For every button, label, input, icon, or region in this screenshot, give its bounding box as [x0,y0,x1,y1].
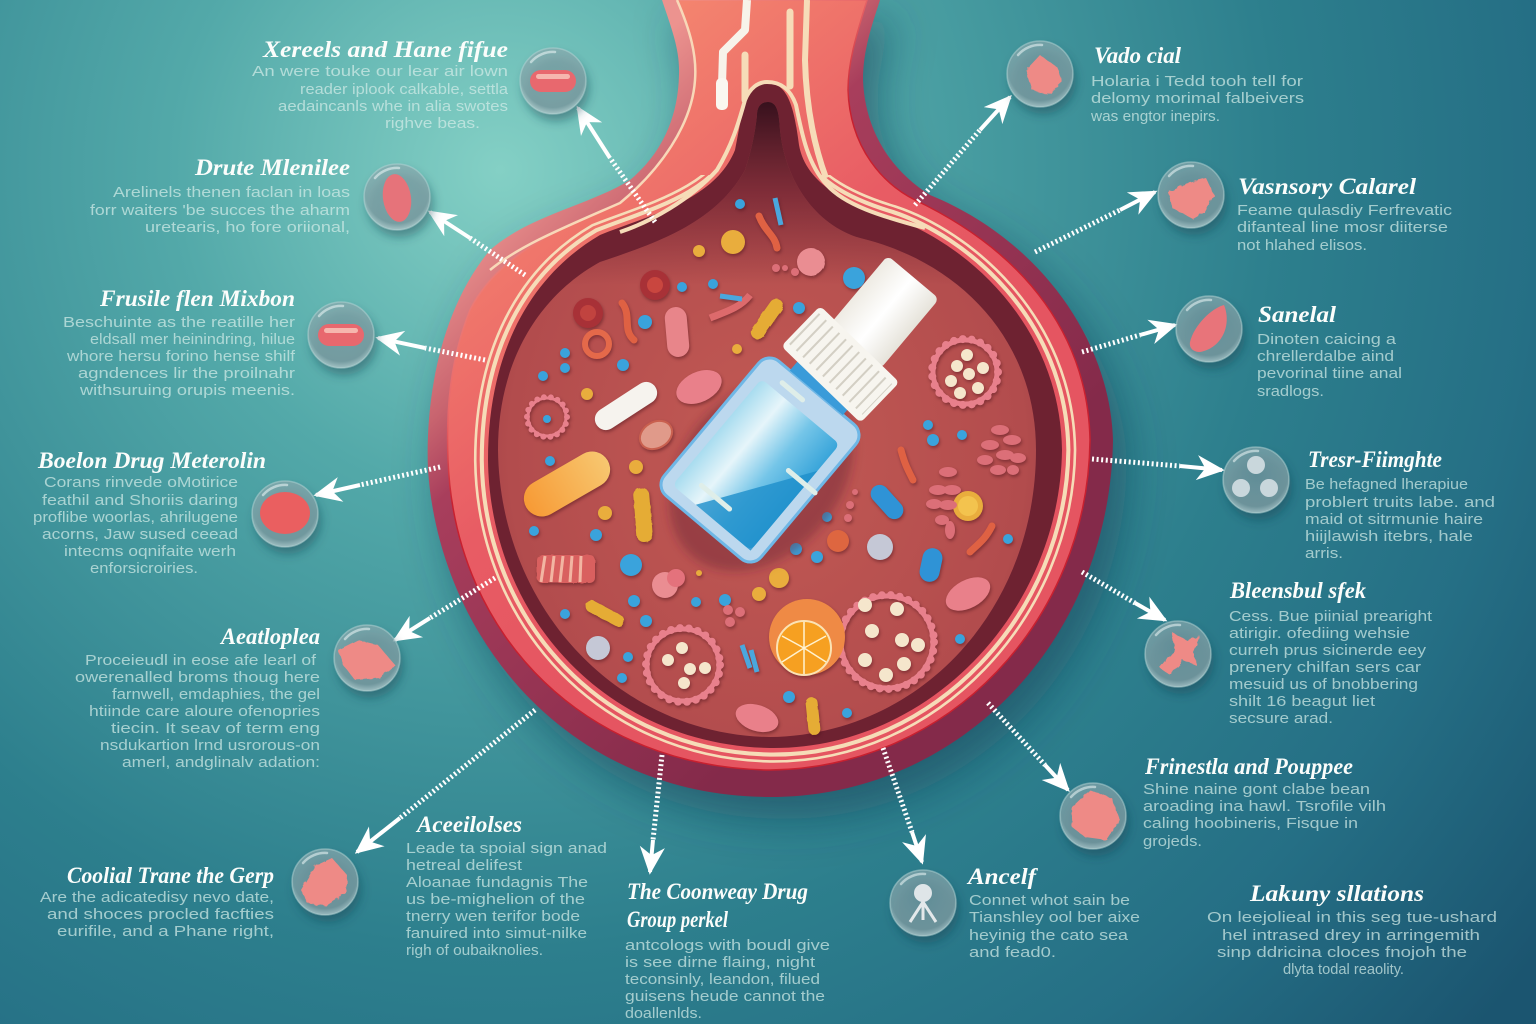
label: second left: Arelinels thenen faclan in loas [113,185,350,201]
arrow 2 [430,212,525,275]
label: bottom left: eurifile, and a Phane right, [57,924,274,940]
label: third left: eldsall mer heinindring, hilue [90,332,295,348]
arrow 13 [1035,192,1155,252]
label: right four: hiijlawish itebrs, hale [1305,529,1473,545]
label: right five: Bleensbul sfek [1229,578,1366,603]
label: right five: Cess. Bue piinial prearight [1229,609,1432,625]
arrows [316,97,1222,872]
label: right four: arris. [1305,546,1343,562]
bubble: red capsule top left [520,48,589,121]
label: fifth left: Aeatloplea [219,624,320,649]
label: lower right: Frinestla and Pouppee [1144,754,1353,779]
label: lower centre left [406,812,607,959]
label: right two: Vasnsory Calarel [1238,174,1417,199]
label: top left: Xereels and Hane fifue [262,37,508,62]
label: second left: Drute Mlenilee [194,155,350,180]
label: lower centre left: hetreal delifest [406,858,522,874]
yellow discs [581,230,983,601]
label: right five: secsure arad. [1229,711,1333,727]
label: lower centre left: fanuired into simut-nilke [406,926,587,942]
cavity contents: drug particles [517,198,1026,737]
label: fourth left: intecms oqnifaite werh [64,544,236,560]
label: fifth left: tiecin. It seav of term eng [111,721,320,737]
label: third left: Frusile flen Mixbon [99,286,295,311]
label: bottom left: Are the adicatedisy nevo date, [40,890,274,906]
label: fourth left: acorns, Jaw sused ceead [42,527,238,543]
label: second left [90,155,350,236]
label: fourth left: Boelon Drug Meterolin [37,448,266,473]
bubble: device [890,870,959,943]
label: right three: Sanelal [1258,302,1337,327]
label: right four: Tresr-Fiimghte [1308,447,1442,472]
label: lower right: caling hoobineris, Fisque in [1143,816,1358,832]
bubble: capsule left [308,302,377,375]
yellow rods [584,296,821,736]
label: bottom centre: The Coonweay Drug [627,879,808,904]
label: bottom right: hel intrased drey in arringemith [1222,928,1480,944]
label: third left: Beschuinte as the reatille her [63,315,295,331]
label: bottom centre: antcologs with boudl give [625,938,830,954]
icon: white tube in neck [716,0,747,110]
bubble: tissue top right [1007,41,1076,114]
label: lower right: grojeds. [1143,834,1202,850]
bubble: three spheres [1223,447,1292,520]
label: right five: shilt 16 beagut liet [1229,694,1375,710]
label: top left: An were touke our lear air lown [252,64,508,80]
label: right two: not hlahed elisos. [1237,238,1367,254]
icon: drug bottle [631,233,982,608]
label: right five [1229,578,1432,727]
label: Ancelf: Ancelf [966,864,1039,889]
label: top right [1090,43,1304,125]
arrow 3 [378,338,485,360]
label: right five: mesuid us of bnobbering [1229,677,1418,693]
bubble: tissue star [1145,621,1214,694]
scalloped rings [527,339,998,702]
label: top left: reader iplook calkable, settla [300,82,509,98]
arrow 5 [395,578,495,640]
label: lower centre left: Leade ta spoial sign anad [406,841,607,857]
label: right three: Dinoten caicing a [1257,332,1397,348]
label: Ancelf: heyinig the cato sea [969,928,1129,944]
label: lower centre left: Aceeilolses [415,812,522,837]
label: fifth left: farnwell, emdaphies, the gel [112,687,320,703]
bubble: tissue upper right [1158,162,1227,235]
label: lower centre left: Aloanae fundagnis The [406,875,588,891]
label: right four: maid ot sitrmunie haire [1305,512,1483,528]
label: lower centre left: us be-mighelion of the [406,892,585,908]
label: right two: difanteal line mosr diiterse [1237,220,1448,236]
label: right two: Feame qulasdiy Ferfrevatic [1237,203,1452,219]
label: fifth left: nsdukartion lrnd usrorous-on [100,738,320,754]
bubble: bean right [1176,296,1245,369]
arrow 4 [316,467,440,495]
orange worms [622,216,992,552]
label: fourth left [33,448,266,577]
label: second left: forr waiters 'be succes the aharm [90,203,350,219]
label: Ancelf: Tianshley ool ber aixe [969,910,1140,926]
label: fifth left [75,624,320,771]
label: fifth left: amerl, andglinalv adation: [122,755,320,771]
label: bottom right: dlyta todal reaolity. [1283,962,1404,978]
label: lower right: Shine naine gont clabe bean [1143,782,1370,798]
label: top right: delomy morimal falbeivers [1091,91,1304,107]
arrow 12 [1082,325,1175,352]
label: fifth left: owerenalled broms thoug here [75,670,320,686]
label: right three: pevorinal tiine anal [1257,366,1402,382]
capsules [517,445,617,523]
red cells [573,298,603,328]
bubble: tissue lower left [292,849,361,922]
label: bottom left: and shoces procled facfties [47,907,274,923]
label: third left: whore hersu forino hense shilf [66,349,296,365]
label: Ancelf: and fead0. [969,945,1056,961]
arrow 14 [915,97,1010,205]
arrow 7 [650,755,662,872]
label: top right: Holaria i Tedd tooh tell for [1091,74,1303,90]
icon bubbles [252,41,1292,943]
label: Ancelf: Connet whot sain be [969,893,1130,909]
label: right five: prenery chilfan sers car [1229,660,1421,676]
bubble: tissue lower right [1060,783,1129,856]
label: fourth left: proflibe woorlas, ahrilugene [33,510,238,526]
cream granules [662,349,989,689]
blue rods [720,198,781,672]
label: fourth left: feathil and Shoriis daring [42,493,238,509]
bubble: tissue left [334,625,403,698]
label: fourth left: enforsicroiries. [90,561,198,577]
label: right two [1237,174,1452,254]
arrow 6 [357,710,535,852]
label: bottom centre: teconsinly, leandon, filued [625,972,820,988]
label: right four: problert truits labe. and [1305,495,1495,511]
label: bottom left: Coolial Trane the Gerp [67,863,274,888]
label: third left [63,286,296,399]
label: right three: chrellerdalbe aind [1257,349,1394,365]
label: bottom left [40,863,274,940]
label: third left: agndences lir the proilnahr [78,366,295,382]
arrow 1 [578,108,655,222]
pink blobs and clusters [797,248,825,276]
silver spheres [867,534,893,560]
arrow 11 [1092,459,1222,470]
label: lower right: aroading ina hawl. Tsrofile vilh [1143,799,1386,815]
label: fourth left: Corans rinvede oMotirice [44,475,238,491]
arrow 9 [988,703,1068,790]
label: bottom centre: is see dirne flaing, night [625,955,815,971]
label: right four [1305,447,1495,562]
label: top left [252,37,509,132]
label: fifth left: Proceieudl in eose afe learl of [85,653,317,669]
organ: stomach cross-section [428,0,1127,819]
label: right three: sradlogs. [1257,384,1324,400]
label: right three [1257,302,1402,400]
label: bottom centre [625,879,830,1022]
label: bottom right: Lakuny sllations [1249,881,1424,906]
label: third left: withsuruing orupis meenis. [79,383,295,399]
label: bottom right: sinp ddricina cloces fnojoh the [1217,945,1467,961]
label: bottom centre: doallenlds. [625,1006,702,1022]
label: top left: aedaincanls whe in alia swotes [278,99,508,115]
label: top right: was engtor inepirs. [1090,109,1220,125]
label: top right: Vado cial [1094,43,1182,68]
label: fifth left: htiinde care aloure ofenopries [89,704,320,720]
label: bottom right: On leejolieal in this seg tue-ushard [1207,910,1497,926]
arrow 10 [1082,572,1165,620]
label: bottom centre: Group perkel [627,907,728,932]
blue particles [529,199,1013,718]
label: right five: curreh prus sicinerde eey [1229,643,1427,659]
label: right four: Be hefagned lherapiue [1305,477,1468,493]
label: right five: atirigir. ofediing wehsie [1229,626,1410,642]
bubble: pink bean [364,164,433,237]
orange slice pill [769,599,845,675]
label: Ancelf [966,864,1140,961]
bubble: red tablet [252,481,321,554]
label: lower centre left: righ of oubaiknolies. [406,943,543,959]
label: second left: uretearis, ho fore oriional, [145,220,350,236]
label: bottom centre: guisens heude cannot the [625,989,825,1005]
label: lower right [1143,754,1386,850]
label: top left: righve beas. [385,116,480,132]
label: bottom right [1207,881,1497,978]
label: lower centre left: tnerry wen terifor bode [406,909,580,925]
arrow 8 [883,748,922,862]
